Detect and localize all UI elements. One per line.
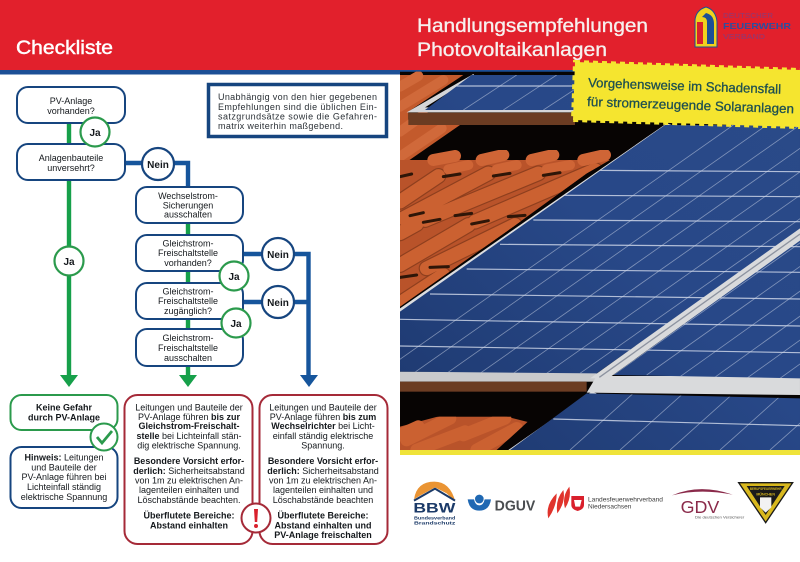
sticker: Vorgehensweise im Schadensfall: Vorgehensweise im Schadensfall [588, 75, 781, 97]
badge: Nein 1 [142, 148, 174, 180]
badge: Ja 2 [54, 246, 84, 276]
title: Handlungsempfehlungen Photovoltaikanlagen [417, 15, 648, 61]
flow box: Gleichstrom-Freischaltstelle vorhanden? [136, 235, 243, 271]
badge: Nein 2: Nein [267, 250, 289, 261]
flow box: Gleichstrom-Freischaltstelle ausschalten: ausschalten [164, 353, 212, 363]
yellow strip below the photo [400, 450, 800, 455]
logo: GDV [672, 489, 745, 519]
logo: DGUV [468, 495, 536, 514]
warning box: bis zur Gleichstrom-Freischaltstelle: Gleichstrom-Freischalt- [138, 421, 240, 431]
badge: Ja 3 [220, 262, 248, 290]
warning box: bis zum Wechselrichter: Wechselrichter bei Licht- [271, 421, 375, 431]
diagonal panel divider [590, 228, 800, 378]
partner logos [413, 482, 793, 525]
flow box: Wechselstrom-Sicherungen ausschalten: ausschalten [164, 210, 212, 220]
badge: Ja 1: Ja [89, 128, 101, 139]
hint box: Hinweis: Hinweis: Leitungen [24, 452, 104, 462]
badge: Nein 3: Nein [267, 298, 289, 309]
flow box: Gleichstrom-Freischaltstelle ausschalten [136, 329, 243, 366]
brown panel rails [408, 113, 575, 125]
badge: Nein 3 [262, 286, 294, 318]
lower roof tiles [400, 416, 528, 450]
badge: Ja 4: Ja [230, 319, 242, 330]
title: Handlungsempfehlungen Photovoltaikanlagen: Photovoltaikanlagen [417, 39, 607, 61]
logo: BBW: Bundesverband [414, 515, 455, 520]
badge: Ja 2: Ja [63, 257, 75, 268]
logo: Landesfeuerwehrverband Niedersachsen: Niedersachsen [588, 504, 632, 511]
flow box: Gleichstrom-Freischaltstelle zugänglich?: Gleichstrom- [162, 286, 214, 296]
badge: Ja 1 [80, 118, 110, 146]
note box: Gefahrenmatrix: matrix weiterhin maßgebend. [218, 121, 343, 131]
warning box: bis zur Gleichstrom-Freischaltstelle: derlich: Sicherheitsabstand [133, 466, 245, 476]
logo: DGUV: DGUV [495, 498, 536, 514]
badge: Nein 1: Nein [147, 160, 169, 171]
logo: Deutscher Feuerwehrverband: DEUTSCHER [723, 13, 773, 20]
warning box: bis zum Wechselrichter: PV-Anlage führen bis zum [270, 412, 376, 422]
logo: Deutscher Feuerwehrverband [695, 7, 791, 47]
hint box: Hinweis: und Bauteile der [31, 462, 97, 472]
flow box: PV-Anlage vorhanden?: vorhanden? [47, 106, 95, 116]
warning box: bis zum Wechselrichter: einfall ständig elektrische [273, 431, 373, 441]
upper roof tiles [400, 75, 463, 167]
flow connectors [69, 123, 308, 376]
note box: Gefahrenmatrix [208, 84, 386, 136]
hint box: Hinweis: PV-Anlage führen bei [21, 472, 107, 482]
result box: Keine Gefahr durch PV-Anlage: durch PV-Anlage [28, 412, 100, 422]
logo: GDV: GDV [681, 497, 719, 517]
flow box: Wechselstrom-Sicherungen ausschalten [136, 187, 243, 223]
photo: solar panels on a tiled roof [380, 72, 800, 450]
title: Handlungsempfehlungen Photovoltaikanlagen: Handlungsempfehlungen [417, 15, 648, 37]
arrow: green left [60, 375, 78, 387]
warning box: bis zur Gleichstrom-Freischaltstelle: Besondere Vorsicht erfor- [134, 456, 244, 466]
logo: Feuerwehr München: BERUFSFEUERWEHR [750, 487, 782, 491]
warning box: bis zum Wechselrichter: Spannung. [301, 440, 345, 450]
warning box: bis zur Gleichstrom-Freischaltstelle: stelle bei Lichteinfall stän- [136, 431, 242, 441]
logo: Deutscher Feuerwehrverband: VERBAND [723, 34, 765, 41]
flow box: Gleichstrom-Freischaltstelle vorhanden?: Gleichstrom- [162, 238, 214, 248]
warning box: bis zum Wechselrichter: Abstand einhalten und [274, 520, 372, 530]
heading: Checkliste: Checkliste [16, 38, 113, 59]
flow box: Gleichstrom-Freischaltstelle vorhanden?: vorhanden? [164, 258, 212, 268]
arrow: blue right [300, 375, 318, 387]
sticker: Vorgehensweise im Schadensfall: für stromerzeugende Solaranlagen [587, 94, 794, 116]
logo: Landesfeuerwehrverband Niedersachsen: Landesfeuerwehrverband [588, 497, 663, 504]
badge: Nein 2 [262, 238, 294, 270]
logo: Deutscher Feuerwehrverband: FEUERWEHR [723, 21, 791, 31]
warning box: bis zur Gleichstrom-Freischaltstelle: von 1m zu elektrischen An- [135, 476, 243, 486]
main roof tiles [400, 155, 613, 310]
warning box: bis zur Gleichstrom-Freischaltstelle [124, 395, 252, 544]
flow box: Gleichstrom-Freischaltstelle vorhanden?: Freischaltstelle [158, 248, 218, 258]
note box: Gefahrenmatrix: satzgrundsätze sowie die Gefahren- [218, 112, 377, 122]
flow box: PV-Anlage vorhanden?: PV-Anlage [50, 96, 92, 106]
logo: Feuerwehr München: MÜNCHEN [756, 491, 775, 496]
sticker: Vorgehensweise im Schadensfall [573, 62, 800, 127]
warning box: bis zum Wechselrichter: derlich: Sicherheitsabstand [267, 466, 379, 476]
warning box: bis zur Gleichstrom-Freischaltstelle: Abstand einhalten [150, 520, 228, 530]
warning box: bis zur Gleichstrom-Freischaltstelle: PV-Anlage führen bis zur [138, 412, 241, 422]
hint box: Hinweis [10, 447, 118, 508]
logo: BBW [413, 482, 456, 525]
flow box: Anlagenbauteile unversehrt?: Anlagenbauteile [39, 153, 103, 163]
hint box: Hinweis: elektrische Spannung [21, 492, 107, 502]
warning box: bis zur Gleichstrom-Freischaltstelle: dig elektrische Spannung. [137, 440, 241, 450]
icon: exclamation mark [242, 504, 270, 532]
warning box: bis zum Wechselrichter: Leitungen und Bauteile der [269, 402, 377, 412]
warning box: bis zum Wechselrichter: von 1m zu elektrischen An- [269, 476, 377, 486]
logo: BBW: BBW [413, 500, 456, 516]
flow box: PV-Anlage vorhanden? [17, 87, 125, 123]
flow box: Wechselstrom-Sicherungen ausschalten: Wechselstrom- [158, 191, 218, 201]
icon: check mark [90, 424, 118, 450]
warning box: bis zum Wechselrichter: Überflutete Bereiche: [277, 510, 369, 520]
flow box: Wechselstrom-Sicherungen ausschalten: Sicherungen [163, 200, 213, 210]
flow box: Anlagenbauteile unversehrt?: unversehrt? [47, 163, 95, 173]
logo: Feuerwehr München [739, 483, 793, 523]
badge: Ja 3: Ja [228, 272, 240, 283]
flow box: Anlagenbauteile unversehrt? [17, 144, 125, 180]
warning box: bis zur Gleichstrom-Freischaltstelle: Leitungen und Bauteile der [135, 402, 243, 412]
arrow: green middle [179, 375, 197, 387]
warning box: bis zum Wechselrichter: PV-Anlage freischalten [274, 530, 372, 540]
header band: red [0, 0, 800, 70]
panel frames [407, 74, 575, 112]
warning box: bis zur Gleichstrom-Freischaltstelle: lagenteilen einhalten und [139, 485, 239, 495]
logo: GDV: Die deutschen Versicherer [695, 515, 745, 519]
result box: Keine Gefahr durch PV-Anlage [10, 395, 118, 430]
warning box: bis zum Wechselrichter: Besondere Vorsicht erfor- [268, 456, 378, 466]
flow box: Gleichstrom-Freischaltstelle zugänglich? [136, 283, 243, 319]
logo: Landesfeuerwehrverband Niedersachsen [548, 487, 663, 518]
logo: BBW: Brandschutz [414, 520, 456, 525]
flow box: Gleichstrom-Freischaltstelle ausschalten: Gleichstrom- [162, 333, 214, 343]
warning box: bis zur Gleichstrom-Freischaltstelle: Überflutete Bereiche: [143, 510, 235, 520]
warning box: bis zum Wechselrichter: lagenteilen einhalten und [273, 485, 373, 495]
solar cells [400, 75, 800, 450]
result box: Keine Gefahr durch PV-Anlage: Keine Gefahr [36, 402, 92, 412]
flow box: Gleichstrom-Freischaltstelle zugänglich?: Freischaltstelle [158, 296, 218, 306]
note box: Gefahrenmatrix: Unabhängig von den hier gegebenen [218, 92, 377, 102]
warning box: bis zum Wechselrichter: Löschabstände beachten [273, 495, 373, 505]
badge: Ja 4 [222, 308, 250, 338]
hint box: Hinweis: Lichteinfall ständig [27, 482, 101, 492]
warning box: bis zur Gleichstrom-Freischaltstelle: Löschabstände beachten. [137, 495, 241, 505]
warning box: bis zum Wechselrichter [260, 395, 388, 544]
note box: Gefahrenmatrix: Empfehlungen sind die üblichen Ein- [218, 102, 377, 112]
flow box: Gleichstrom-Freischaltstelle ausschalten: Freischaltstelle [158, 343, 218, 353]
solar cell grid lines [380, 75, 800, 450]
header rule: blue [0, 70, 800, 74]
flow box: Gleichstrom-Freischaltstelle zugänglich?: zugänglich? [164, 306, 212, 316]
